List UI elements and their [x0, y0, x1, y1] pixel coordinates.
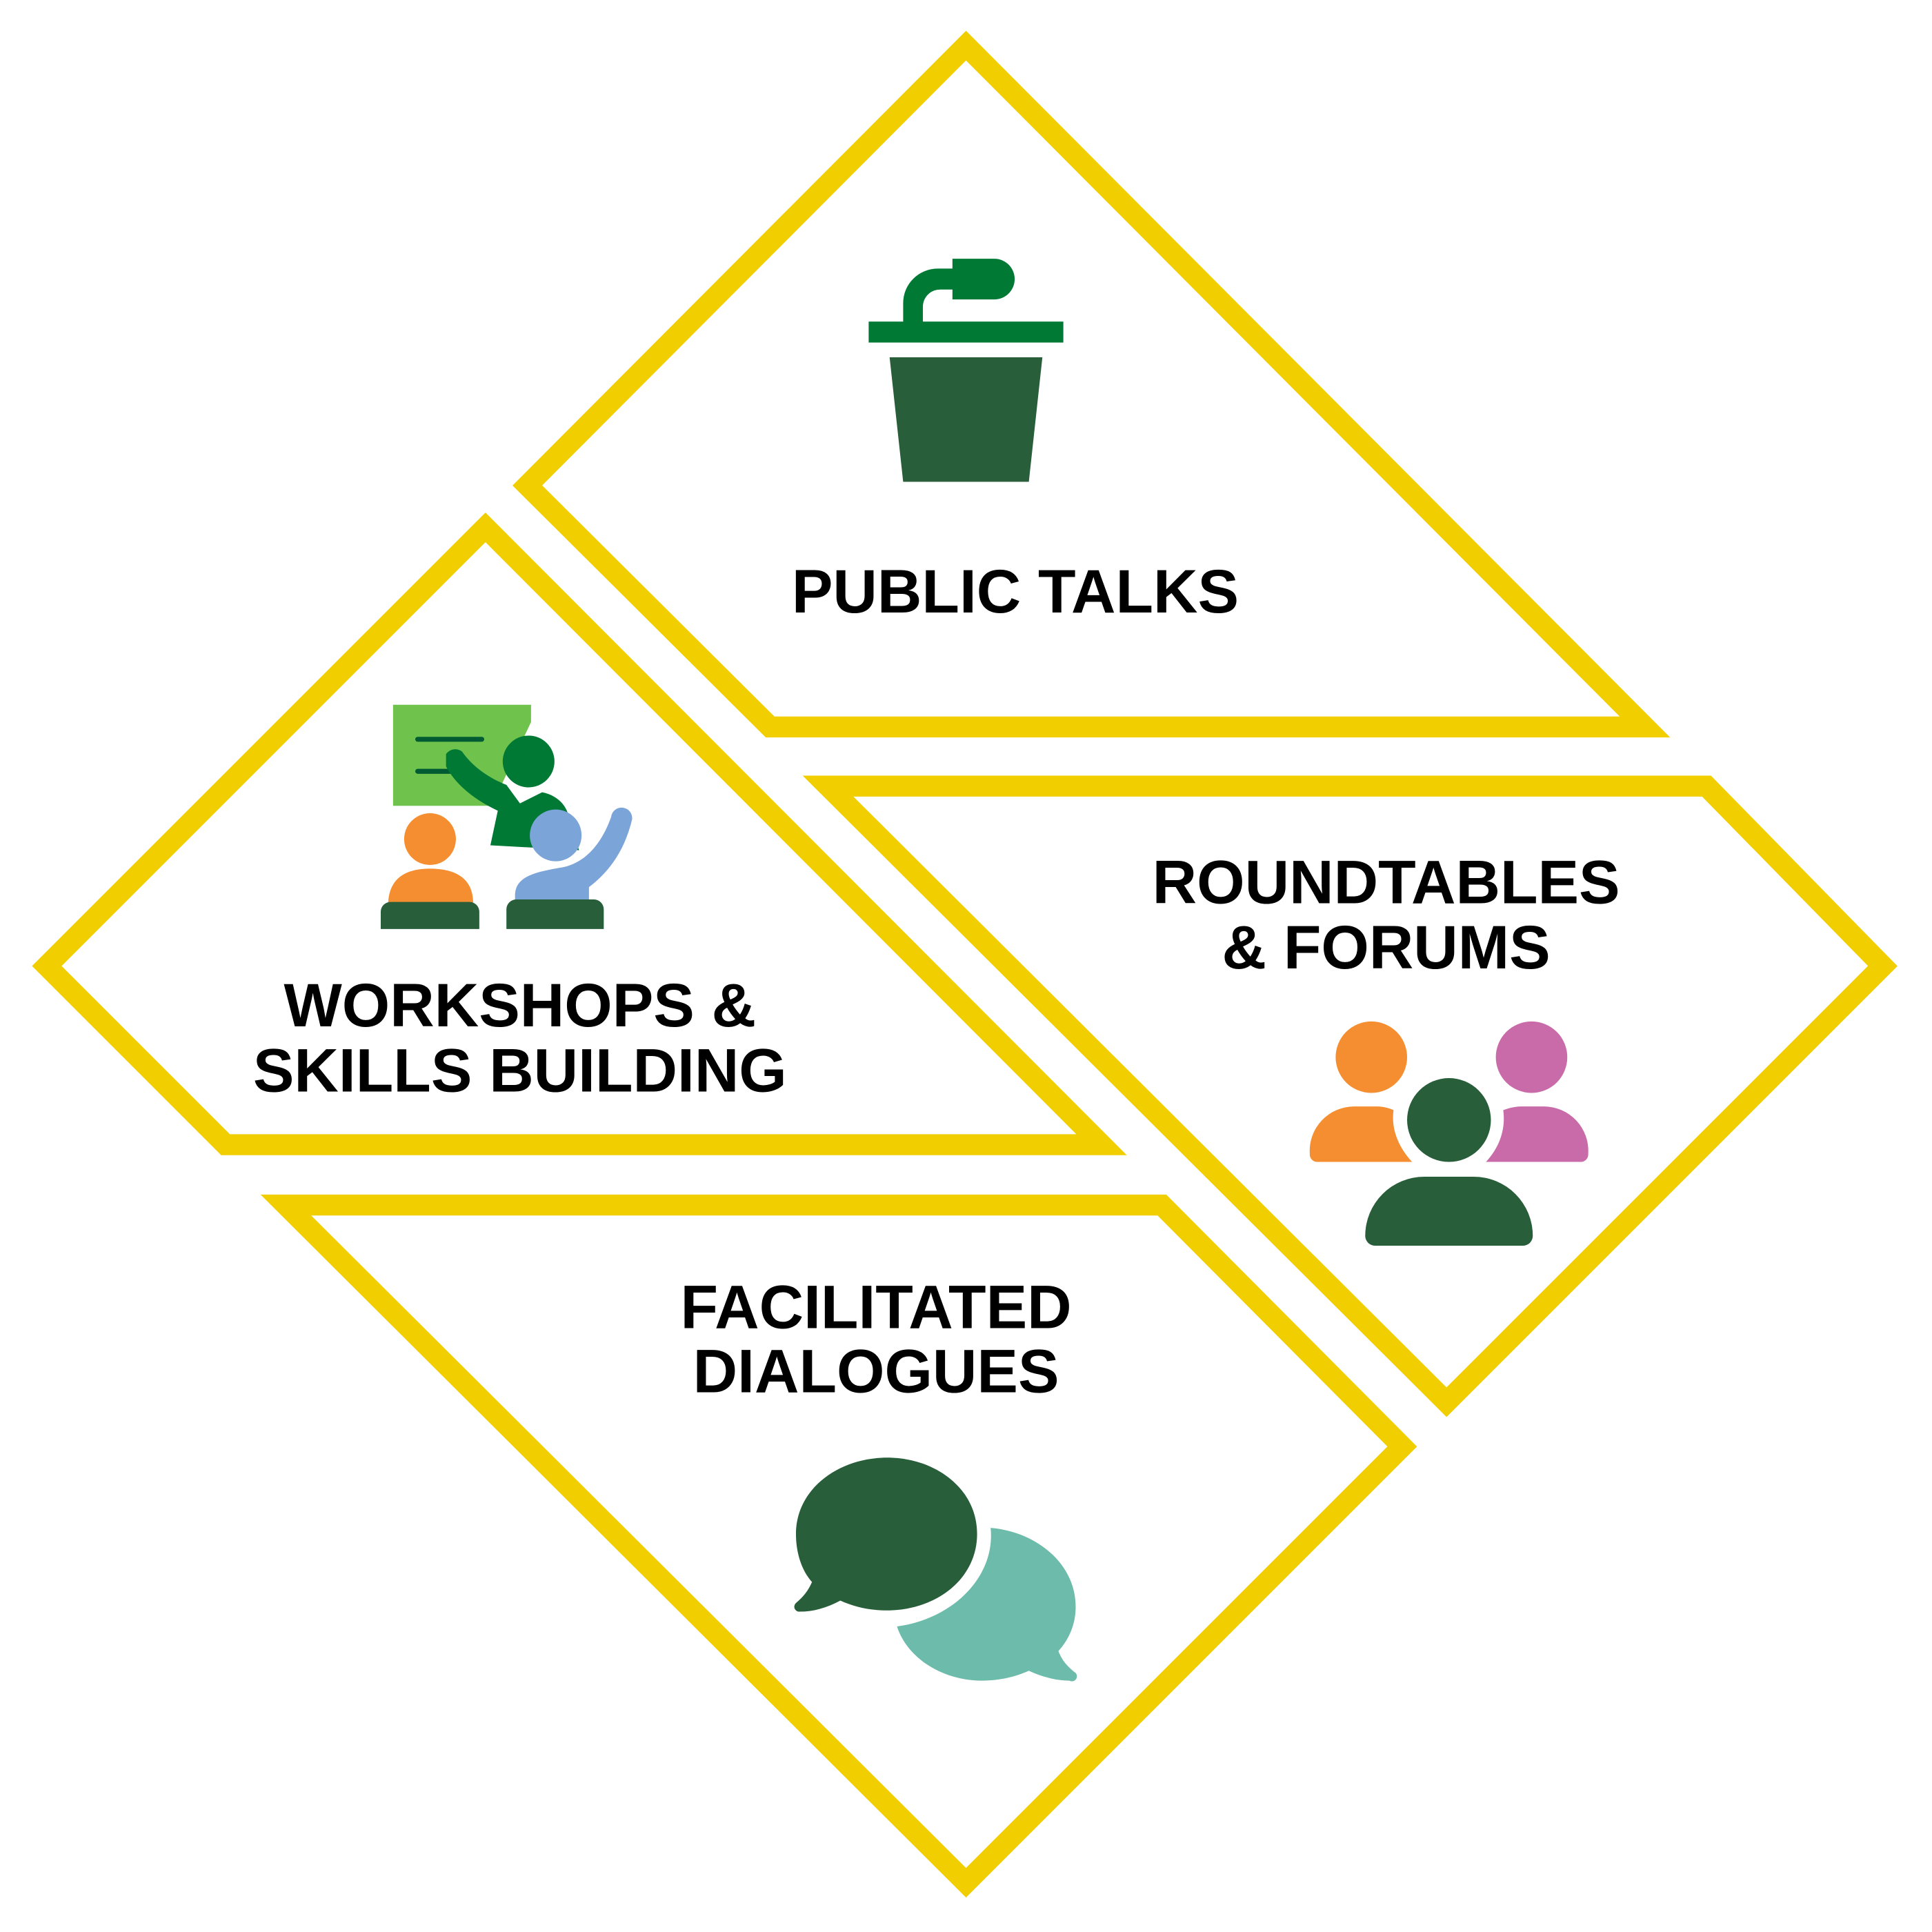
- panel: facilitated dialogues: [286, 1205, 1402, 1883]
- icon: podium: [868, 259, 1064, 481]
- icon: group: [1310, 1022, 1589, 1246]
- icon: classroom: [381, 705, 633, 929]
- panel: roundtables: & FORUMS: [1222, 913, 1551, 982]
- panel: facilitated dialogues: DIALOGUES: [693, 1337, 1059, 1406]
- heading: public talks: PUBLIC TALKS: [792, 557, 1239, 626]
- panel: roundtables: [828, 786, 1883, 1402]
- panel: public talks: [528, 46, 1645, 727]
- panel: workshops: [47, 528, 1102, 1145]
- heading: workshops: WORKSHOPS &: [284, 970, 756, 1039]
- icon: speech bubbles: [795, 1457, 1077, 1682]
- heading: dialogues: FACILITATED: [681, 1273, 1072, 1342]
- heading: roundtables: ROUNDTABLES: [1153, 847, 1620, 916]
- panel: workshops: SKILLS BUILDING: [253, 1036, 787, 1105]
